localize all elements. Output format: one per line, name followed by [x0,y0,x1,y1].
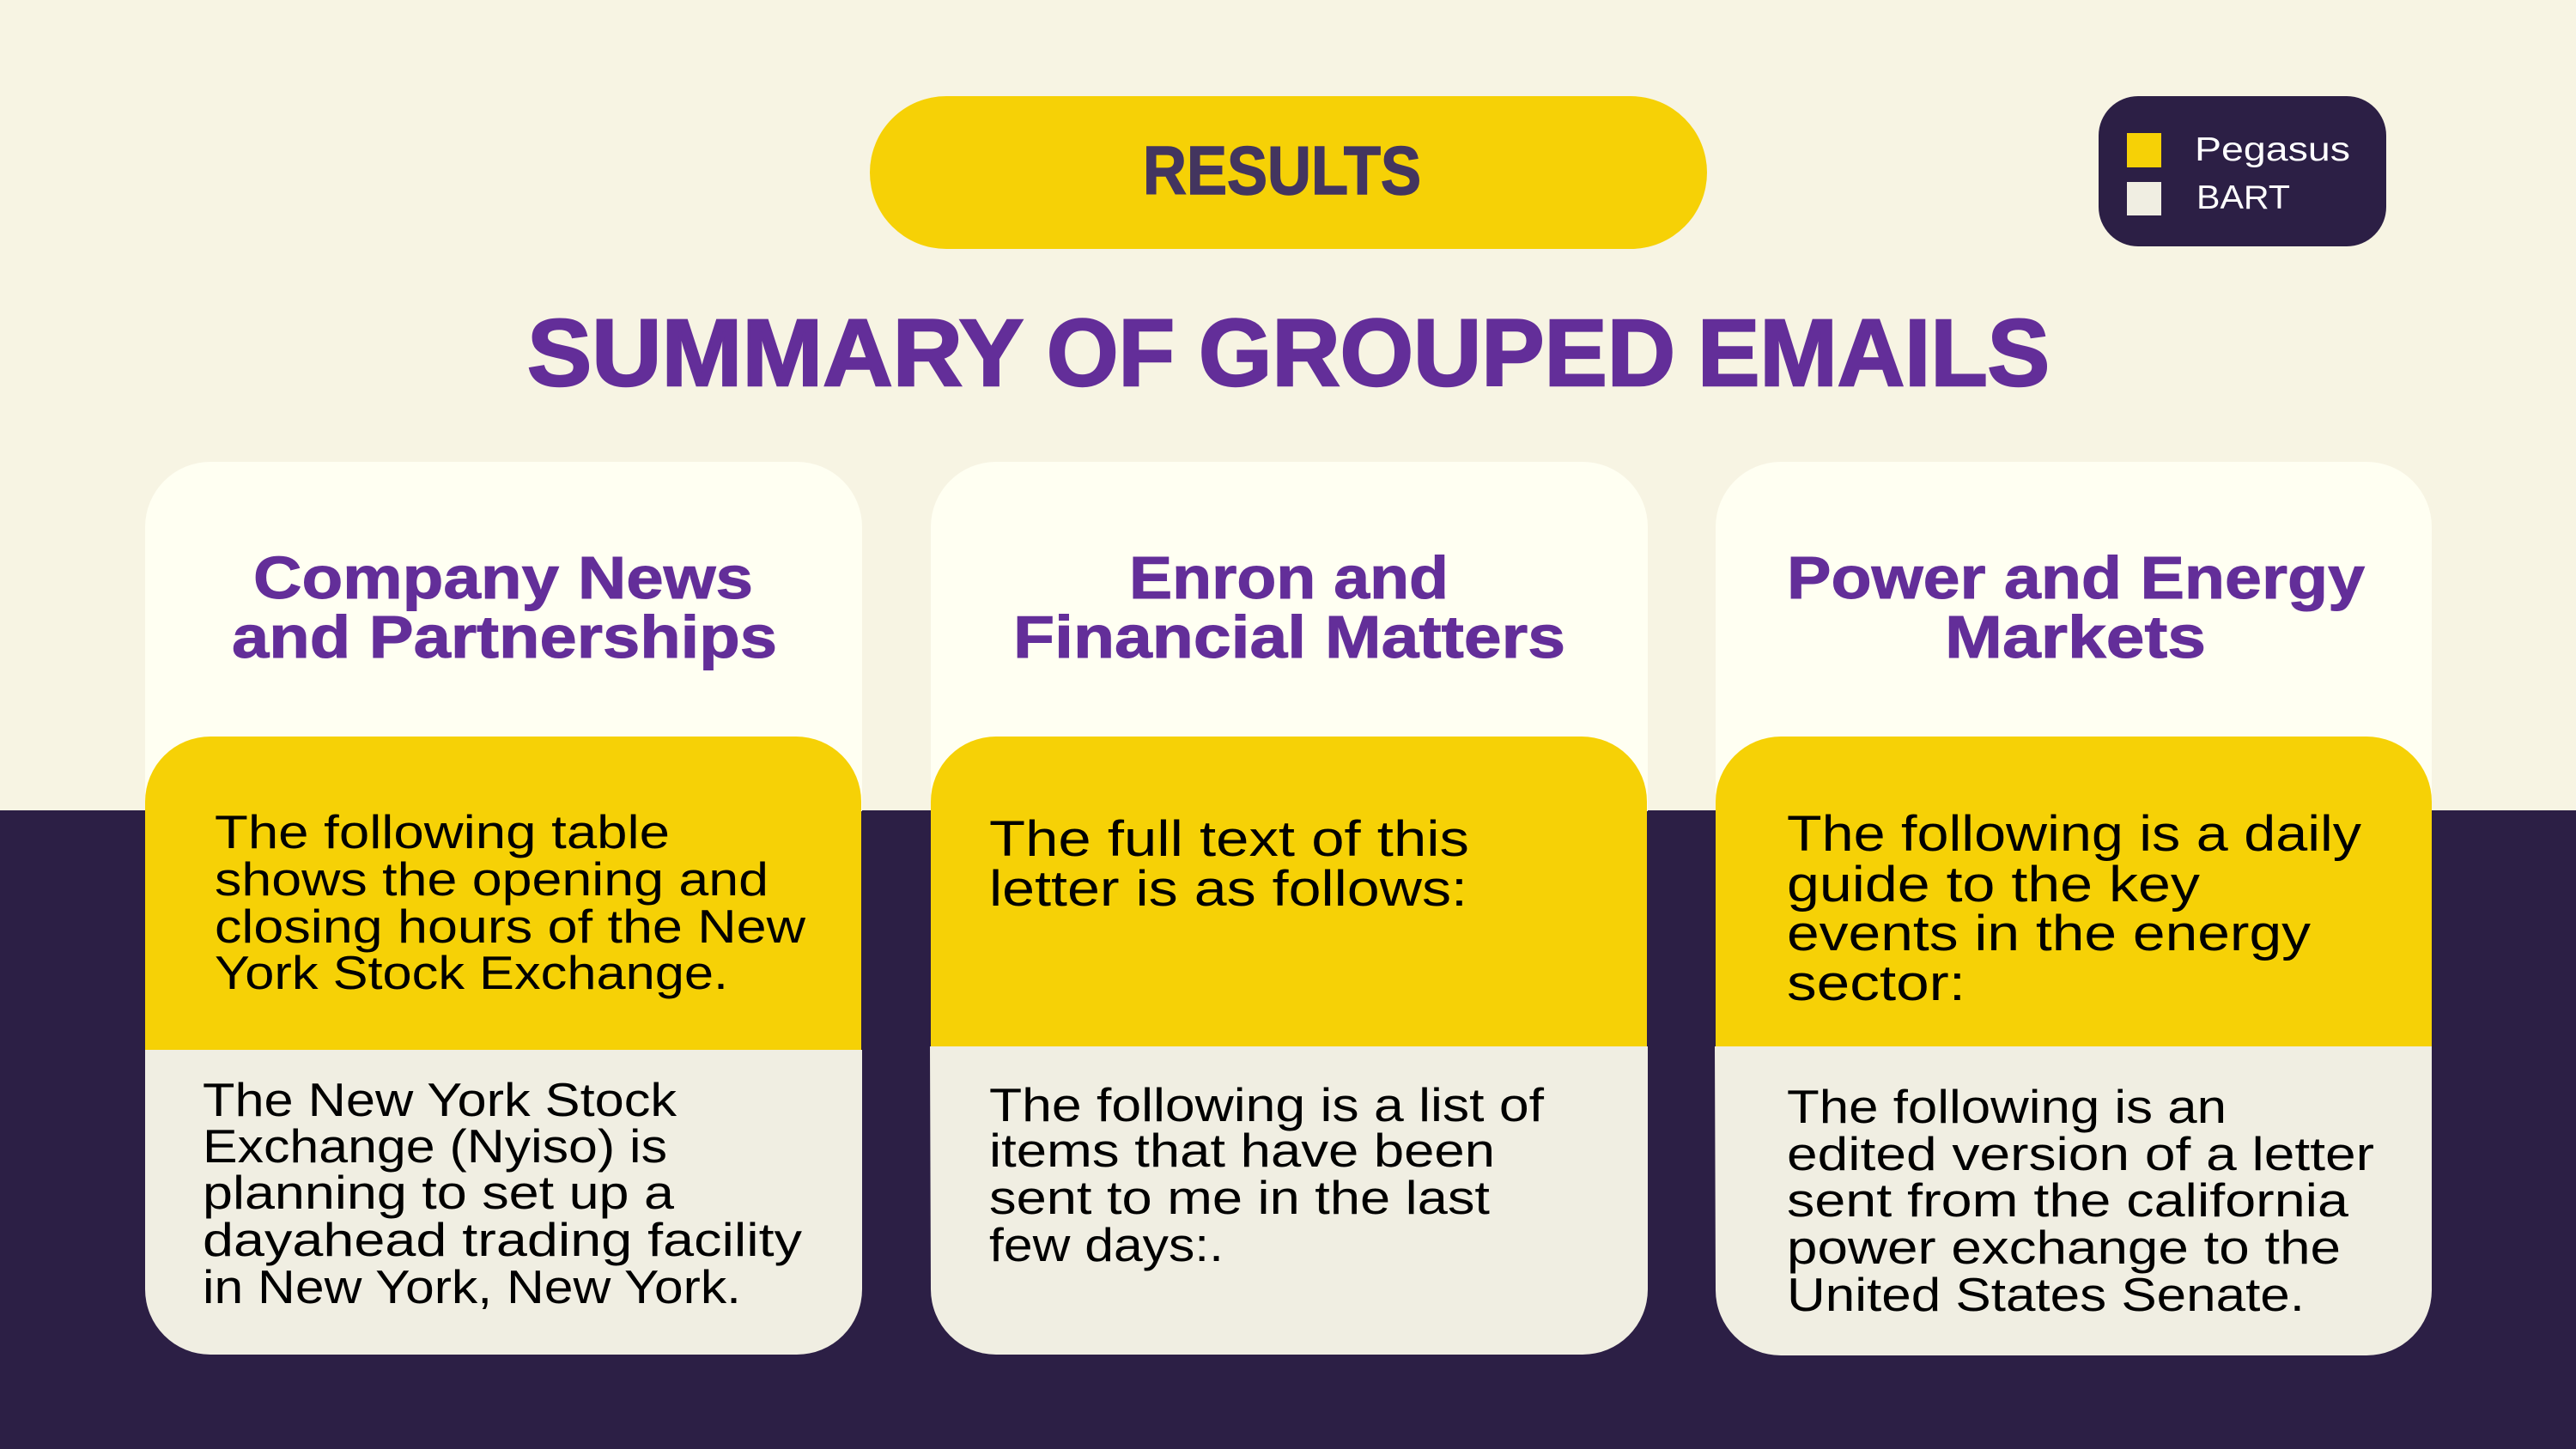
summary text: BART: in New York, New York. [203,1260,741,1313]
summary text: Pegasus: sector: [1787,955,1965,1011]
heading: Enron and [1129,544,1449,611]
title: EMAILS [1698,300,2050,406]
summary text: BART: items that have been [989,1124,1495,1177]
summary text: Pegasus [989,811,1469,917]
summary text: BART: United States Senate. [1787,1268,2305,1321]
summary text: BART [989,1078,1545,1271]
summary text: Pegasus [1787,806,2361,1011]
title: GROUPED [1199,300,1675,406]
summary text: Pegasus: The following table [215,805,670,858]
summary text: Pegasus: The full text of this [989,811,1469,867]
summary text: Pegasus: The following is a daily [1787,806,2361,862]
summary text: Pegasus: closing hours of the New [215,900,805,953]
title: OF [1047,300,1175,406]
summary text: Pegasus: letter is as follows: [989,861,1467,917]
panel: enron and financial matters [930,462,1648,1355]
title: SUMMARY [527,300,1024,406]
heading [1013,544,1565,670]
summary text: BART: The following is a list of [989,1078,1545,1131]
summary text: BART: The New York Stock [203,1073,677,1126]
summary text: BART: edited version of a letter [1787,1127,2374,1180]
summary text: Pegasus [215,805,805,999]
summary text: BART: sent from the california [1787,1173,2348,1227]
heading: and Partnerships [232,603,777,670]
title [527,300,2050,406]
legend: Pegasus [2195,131,2350,168]
results badge [870,96,1707,249]
summary text: Pegasus: guide to the key [1787,857,2200,912]
summary text: Pegasus: York Stock Exchange. [215,946,728,999]
summary text: BART: power exchange to the [1787,1221,2341,1274]
heading: Company News [253,544,753,611]
heading [1787,544,2365,670]
legend: BART [2196,179,2290,216]
summary text: BART: Exchange (Nyiso) is [203,1119,667,1173]
panel: company news and partnerships [145,462,862,1355]
summary text: BART [1787,1080,2374,1321]
heading: Markets [1945,603,2206,670]
summary text: BART: The following is an [1787,1080,2227,1133]
summary text: BART: sent to me in the last [989,1171,1490,1224]
legend [2099,96,2386,246]
summary text: Pegasus: events in the energy [1787,906,2311,961]
heading: Financial Matters [1013,603,1565,670]
summary text: BART: planning to set up a [203,1166,674,1219]
summary text: Pegasus: shows the opening and [215,852,769,906]
summary text: BART: dayahead trading facility [203,1213,803,1266]
results badge: RESULTS [1143,132,1421,209]
heading: Power and Energy [1787,544,2365,611]
heading [232,544,777,670]
panel: power and energy markets [1715,462,2432,1355]
summary text: BART [203,1073,803,1313]
summary text: BART: few days:. [989,1218,1224,1271]
